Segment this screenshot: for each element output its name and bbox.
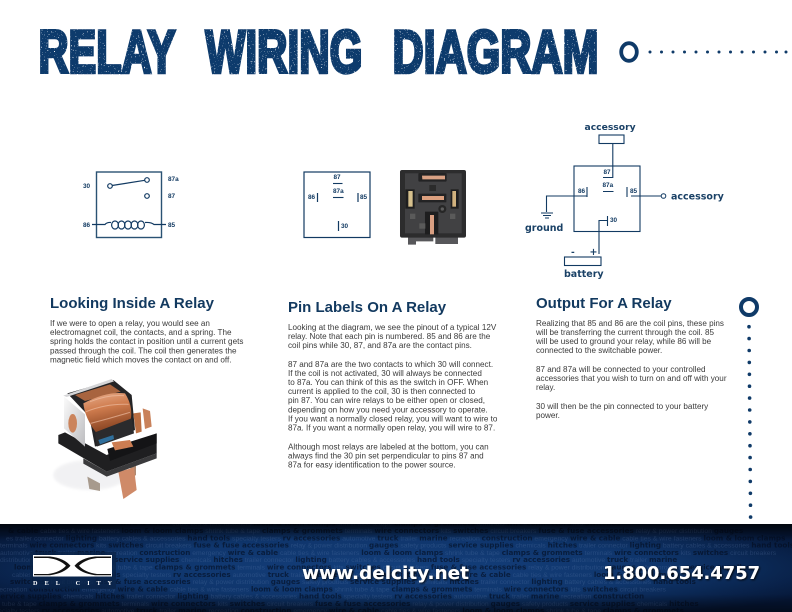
diagram: output wiring: accessory: [671, 192, 725, 202]
footer keyword texture: recreation construction emergency wire & cable cable ties & wire fasteners loom & loom clamps shrink tube & tape clamps & grommets terminals wire connectors kits switches circuit breakers: [0, 584, 666, 593]
diagram: output wiring: +: [590, 247, 597, 258]
diagram: output wiring: [525, 122, 725, 280]
website: www.delcity.net: [302, 563, 469, 584]
diagram: output wiring: 87a: [602, 182, 614, 189]
diagram: output wiring: 85: [630, 188, 638, 195]
diagram: pin labels: 30: [341, 223, 349, 230]
diagram: inside a relay schematic: [83, 172, 179, 238]
side ring and dotted line: [741, 299, 757, 519]
panel: output for a relay: [535, 295, 727, 420]
panel: looking inside a relay: passed through the coil. The coil then generates the: [50, 346, 237, 356]
title: DIAGRAM: [392, 18, 598, 85]
panel: pin labels on a relay: If the coil is not activated, 30 will always be connected: [288, 369, 482, 378]
top ring and dotted line: [621, 43, 788, 61]
footer keyword texture: & cable cable ties & wire fasteners loom & loom clamps shrink tube & tape clamps & grommets terminals wire connectors kits switches circuit breakers fuse & fuse accessories relay & power distribution gauges: [8, 526, 743, 535]
panel: output for a relay: Output For A Relay: [536, 295, 672, 312]
panel: looking inside a relay: If we were to open a relay, you would see an: [50, 319, 210, 328]
title: RELAY: [38, 18, 176, 85]
panel: pin labels on a relay: pin 87. You can wire relays to be either open or closed,: [288, 396, 485, 405]
panel: pin labels on a relay: always find the 30 pin set perpendicular to pins 87 and: [288, 452, 484, 460]
photo: relay internals: [53, 379, 157, 499]
panel: looking inside a relay: electromagnet coil, the contacts, and a spring. The: [50, 328, 232, 337]
panel: output for a relay: Realizing that 85 and 86 are the coil pins, these pins: [536, 319, 724, 328]
diagram: output wiring: 87: [604, 169, 611, 176]
panel: pin labels on a relay: current is applied to the coil, 30 is then connected to: [288, 387, 476, 396]
panel: pin labels on a relay: If you want a normally closed relay, you will want to wire to: [288, 414, 498, 424]
panel: output for a relay: connected to the switchable power.: [536, 346, 662, 355]
panel: pin labels on a relay: depending on how you need your accessory to operate.: [288, 406, 488, 414]
diagram: output wiring: 86: [578, 188, 586, 195]
panel: pin labels on a relay: 87 and 87a are the two contacts to which 30 will connect.: [288, 360, 493, 369]
diagram: inside a relay schematic: 30: [83, 183, 91, 190]
diagram: output wiring: ground: [525, 223, 563, 234]
panel: output for a relay: will be used to ground your relay, while 86 will be: [535, 337, 712, 346]
diagram: output wiring: 30: [610, 217, 618, 224]
footer keyword texture: distribution gauges safety products service supplies chemicals hitches trailer connector lighting battery cables & accessories hand tools specialty testers rv accessories automotive truck trailer marine: [0, 555, 677, 564]
panel: pin labels on a relay: 87a for easy identification to the power source.: [288, 460, 456, 470]
footer keyword texture: wire & cable cable ties & wire fasteners loom & loom clamps shrink tube & tape clamps & grommets terminals wire connectors kits switches: [120, 518, 620, 528]
footer keyword texture: terminals wire connectors kits switches circuit breakers fuse & fuse accessories relay & power distribution gauges safety products service supplies chemicals hitches trailer connector lighting battery cables & accessories hand tools: [0, 541, 792, 550]
footer keyword texture: cables & accessories hand tools specialty testers rv accessories automotive truck trailer marine recreation construction emergency wire & cable cable ties & wire fasteners loom & loom clamps: [12, 570, 676, 579]
title: WIRING: [206, 18, 362, 85]
footer keyword texture: loom & loom clamps shrink tube & tape clamps & grommets terminals wire connectors kits switches circuit breakers fuse & fuse accessories relay & power distribution gauges safety products service supplies: [14, 562, 751, 572]
diagram: pin labels: 86: [308, 194, 316, 201]
panel: output for a relay: accessories that you wish to turn on and off with your: [536, 374, 727, 383]
footer keyword texture: switches circuit breakers fuse & fuse accessories relay & power distribution gauges safety products service supplies chemicals hitches trailer connector lighting battery cables & accessories hand tools: [10, 577, 696, 586]
logo: Del City: D E L C I T Y: [33, 580, 113, 587]
diagram: pin labels: 85: [360, 194, 368, 201]
panel: looking inside a relay: spring holds the contact in position until a current gets: [50, 337, 243, 346]
diagram: pin labels: 87: [334, 174, 341, 181]
footer keyword texture: service supplies chemicals hitches trailer connector lighting battery cables & accessories hand tools specialty testers rv accessories automotive truck trailer marine recreation construction: [0, 592, 644, 601]
panel: output for a relay: will be transferring the current through the coil. 85: [535, 328, 715, 337]
footer band: [0, 518, 792, 612]
panel: looking inside a relay: magnetic field which moves the contact on and off.: [50, 356, 232, 364]
diagram: inside a relay schematic: 86: [83, 222, 91, 229]
footer keyword texture: [0, 518, 792, 612]
diagram: inside a relay schematic: 87a: [168, 176, 179, 183]
diagram: pin labels: [304, 172, 370, 238]
logo: Del City: [30, 552, 116, 589]
panel: output for a relay: power.: [536, 411, 560, 420]
diagram: inside a relay schematic: 87: [168, 193, 176, 200]
panel: pin labels on a relay: [288, 299, 498, 470]
panel: pin labels on a relay: Although most relays are labeled at the bottom, you can: [288, 442, 489, 452]
panel: pin labels on a relay: 87a. If you want a normally open relay, you will wire to 87.: [288, 424, 495, 432]
panel: looking inside a relay: [50, 295, 243, 364]
footer keyword texture: es trailer connector lighting battery cables & accessories hand tools specialty testers rv accessories automotive truck trailer marine recreation construction emergency wire & cable cable ties & wire fasteners loom & loom clamps: [6, 533, 785, 542]
panel: output for a relay: 87 and 87a will be connected to your controlled: [536, 365, 706, 374]
panel: output for a relay: 30 will then be the pin connected to your battery: [536, 402, 709, 411]
diagram: output wiring: -: [571, 248, 575, 258]
panel: pin labels on a relay: to 87a. You can think of this as the switch in OFF. When: [288, 378, 488, 387]
panel: output for a relay: relay.: [536, 383, 555, 392]
title: [38, 18, 598, 85]
panel: pin labels on a relay: Looking at the diagram, we see the pinout of a typical 12V: [288, 323, 497, 332]
panel: looking inside a relay: Looking Inside A Relay: [50, 295, 215, 312]
panel: pin labels on a relay: coil pins while 30, 87, and 87a are the contact pins.: [288, 341, 472, 350]
footer keyword texture: tube & tape clamps & grommets terminals wire connectors kits switches circuit breakers fuse & fuse accessories relay & power distribution gauges safety products service supplies chemicals hitches: [2, 599, 699, 608]
diagram: inside a relay schematic: 85: [168, 222, 176, 229]
photo: relay underside: [400, 170, 466, 245]
phone number: 1.800.654.4757: [603, 563, 760, 584]
diagram: output wiring: accessory: [584, 122, 636, 133]
diagram: output wiring: battery: [564, 269, 604, 280]
panel: pin labels on a relay: relay. Note that each pin is numbered. 85 and 86 are the: [288, 332, 491, 341]
panel: pin labels on a relay: Pin Labels On A Relay: [288, 299, 447, 316]
diagram: pin labels: 87a: [333, 188, 344, 195]
footer keyword texture: automotive truck trailer marine recreation construction emergency wire & cable cable ties & wire fasteners loom & loom clamps shrink tube & tape clamps & grommets terminals wire connectors kits switches circuit breakers: [0, 548, 777, 557]
